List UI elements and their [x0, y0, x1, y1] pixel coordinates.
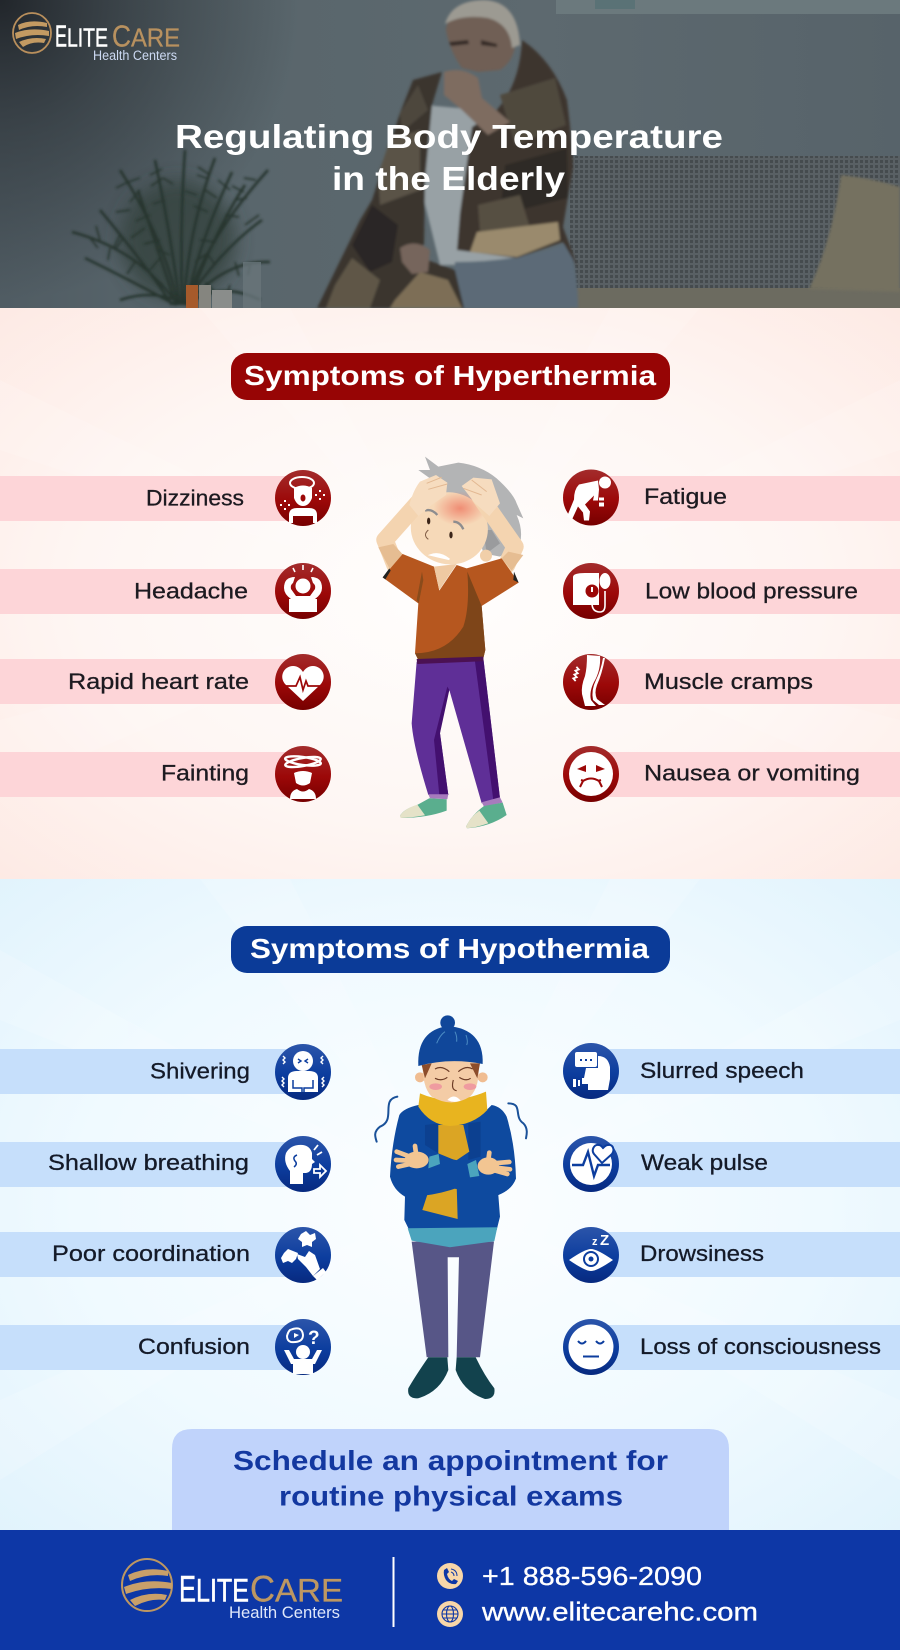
symptom: Headache	[0, 563, 331, 619]
trousers	[412, 658, 500, 803]
logo: Elite Care footer: LITE	[196, 1572, 249, 1608]
cuffs and shoes	[428, 794, 503, 807]
symptom: Slurred speech	[563, 1043, 900, 1099]
hat	[418, 1026, 483, 1066]
symptom: Shallow breathing	[0, 1136, 331, 1192]
illustration: overheated elderly man	[378, 457, 523, 828]
callout: schedule an appointment	[172, 1429, 729, 1530]
head	[415, 1072, 425, 1082]
symptom: Confusion: Confusion	[138, 1334, 250, 1359]
symptom: Drowsiness: z	[592, 1236, 598, 1248]
symptom: Drowsiness: Drowsiness	[640, 1241, 764, 1266]
logo: Elite Care footer: E	[179, 1568, 196, 1610]
symptom: Dizziness: Dizziness	[146, 486, 244, 510]
symptom: Shivering	[0, 1044, 331, 1100]
hands	[396, 1146, 510, 1174]
photo: medicine bottles	[186, 262, 261, 308]
symptom: Fatigue	[563, 470, 900, 526]
phone number: +1 888-596-2090	[482, 1561, 702, 1591]
panel: hypothermia	[0, 879, 900, 1530]
forearm and fist	[444, 70, 510, 135]
symptom: Muscle cramps: Muscle cramps	[644, 669, 813, 694]
symptom: Poor coordination	[0, 1227, 331, 1283]
symptom: Weak pulse: Weak pulse	[641, 1150, 768, 1175]
symptom: Nausea or vomiting: Nausea or vomiting	[644, 760, 860, 786]
logo: Elite Care footer: Health Centers	[229, 1603, 340, 1622]
logo: Elite Care top	[13, 13, 180, 63]
symptom: Shivering: Shivering	[150, 1058, 250, 1084]
blanket left	[317, 72, 464, 308]
shirt	[424, 105, 520, 265]
logo: Elite Care top: ARE	[131, 22, 180, 52]
logo: Elite Care top: E	[55, 18, 67, 54]
blanket right	[457, 40, 578, 268]
heading: Symptoms of Hyperthermia: Symptoms of Hyperthermia	[244, 360, 656, 391]
icon: phone	[437, 1563, 463, 1589]
hero photo banner	[0, 0, 900, 308]
logo: Elite Care footer: C	[250, 1568, 275, 1610]
title: Regulating Body Temperature	[175, 118, 723, 155]
symptom: Poor coordination: Poor coordination	[52, 1241, 250, 1266]
symptom: Headache: Headache	[134, 578, 248, 604]
crossed arms	[390, 1157, 516, 1197]
symptom: Muscle cramps	[563, 654, 900, 710]
jeans	[450, 243, 578, 308]
photo: elderly man wrapped in a blanket	[317, 0, 578, 308]
logo: Elite Care top: C	[112, 18, 131, 54]
shirt	[383, 554, 519, 661]
logo: Elite Care footer	[122, 1559, 343, 1622]
symptom: Confusion	[0, 1319, 331, 1375]
logo: Elite Care footer: ARE	[275, 1572, 343, 1608]
symptom: Low blood pressure	[563, 563, 900, 619]
hair	[418, 457, 523, 557]
symptom: Rapid heart rate: Rapid heart rate	[68, 669, 249, 694]
symptom: Drowsiness	[563, 1227, 900, 1283]
title	[175, 118, 723, 197]
scarf	[422, 1125, 469, 1219]
face	[404, 485, 495, 572]
trousers	[412, 1242, 494, 1357]
website: www.elitecarehc.com	[481, 1596, 758, 1626]
arms	[385, 495, 515, 565]
symptom: Weak pulse	[563, 1136, 900, 1192]
callout: schedule an appointment: routine physical exams	[279, 1480, 623, 1512]
shoes	[408, 1357, 495, 1399]
heading: Symptoms of Hypothermia: Symptoms of Hypothermia	[250, 933, 649, 964]
symptom: Drowsiness: Z	[600, 1232, 609, 1249]
symptom: Fainting: Fainting	[161, 760, 249, 786]
symptom: Confusion: ?	[308, 1328, 320, 1349]
illustration: shivering man in winter clothes	[375, 1015, 527, 1399]
cold squiggles	[375, 1097, 527, 1142]
symptom: Loss of consciousness	[563, 1319, 900, 1375]
icon: globe	[437, 1601, 463, 1627]
footer	[0, 1530, 900, 1650]
photo: potted plant	[72, 150, 270, 305]
logo: Elite Care top: Health Centers	[93, 48, 177, 63]
symptom: Rapid heart rate	[0, 654, 331, 710]
symptom: Fainting	[0, 746, 331, 802]
hand on knee	[400, 243, 430, 274]
symptom: Fatigue: Fatigue	[644, 484, 727, 509]
sweater	[390, 1105, 516, 1232]
heading: Symptoms of Hyperthermia	[231, 353, 670, 400]
logo: Elite Care top: LITE	[67, 22, 108, 52]
symptom: Nausea or vomiting	[563, 746, 900, 802]
panel: hyperthermia	[0, 308, 900, 879]
photo: sofa	[570, 156, 900, 308]
symptom: Low blood pressure: Low blood pressure	[645, 578, 858, 604]
hands	[409, 475, 447, 516]
title: in the Elderly	[332, 160, 566, 197]
symptom: Shallow breathing: Shallow breathing	[48, 1150, 249, 1175]
head	[446, 16, 515, 72]
symptom: Slurred speech: Slurred speech	[640, 1058, 804, 1083]
symptom: Loss of consciousness: Loss of consciousness	[640, 1334, 881, 1359]
callout: schedule an appointment: Schedule an appointment for	[233, 1445, 668, 1476]
heading: Symptoms of Hypothermia	[231, 926, 670, 973]
symptom: Dizziness	[0, 470, 331, 526]
